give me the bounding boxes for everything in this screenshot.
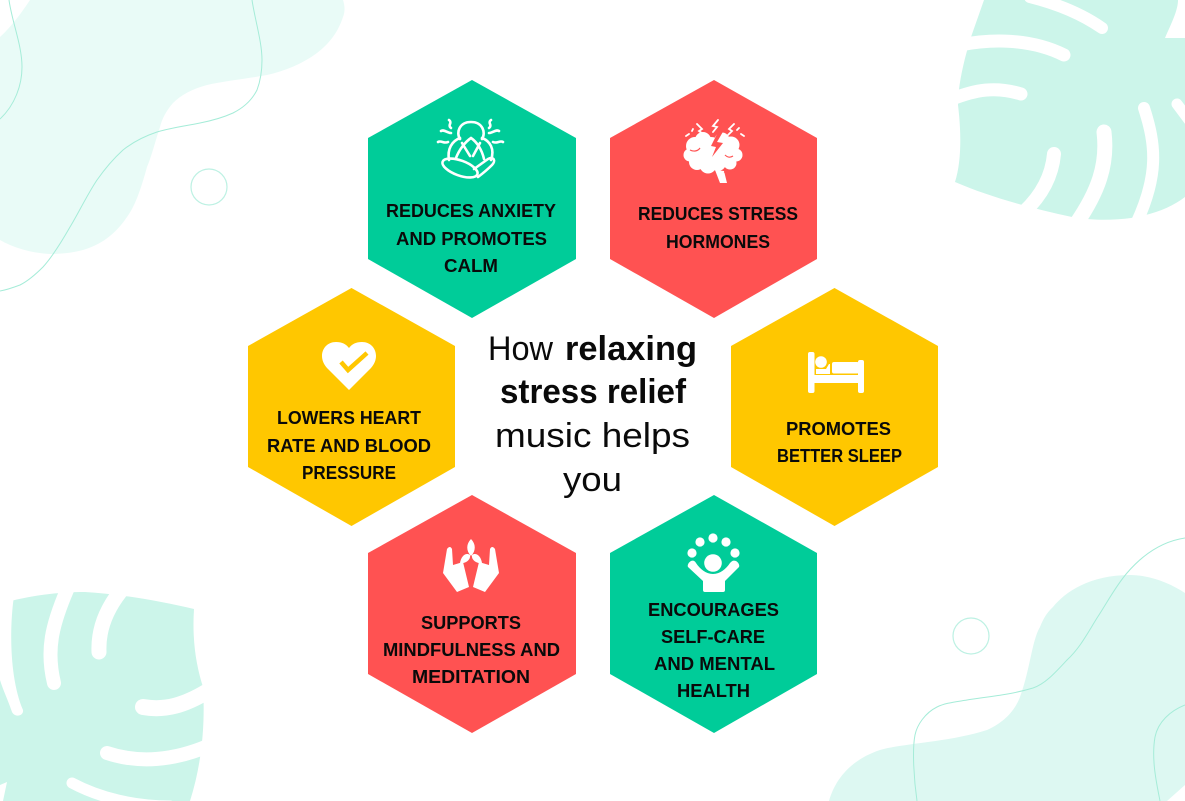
icon: hands with lotus — [443, 539, 499, 592]
hexagon — [610, 495, 817, 733]
label: HEALTH — [677, 680, 750, 701]
panel: encourages self-care — [610, 495, 817, 733]
hexagon — [248, 288, 455, 526]
label: HORMONES — [666, 231, 770, 252]
hexagon — [610, 80, 817, 318]
label: CALM — [444, 255, 498, 276]
icon: bed — [808, 352, 864, 393]
label: RATE AND BLOOD — [267, 435, 431, 456]
background leaf: bottom left — [0, 590, 208, 801]
background blob: top left — [0, 0, 344, 291]
label: MINDFULNESS AND — [383, 639, 560, 660]
panel: lowers heart rate — [248, 288, 455, 526]
icon: brain with lightning — [684, 120, 744, 183]
background blob: bottom right — [829, 538, 1185, 801]
title: How — [488, 330, 553, 368]
title: relaxing — [565, 330, 697, 368]
label: AND PROMOTES — [396, 228, 547, 249]
background leaf: top right — [952, 0, 1185, 224]
hexagon — [368, 80, 576, 318]
title: music helps — [495, 417, 690, 455]
panel: promotes better sleep — [731, 288, 938, 526]
panel: supports mindfulness — [368, 495, 576, 733]
title: you — [563, 461, 622, 499]
label: AND MENTAL — [654, 653, 775, 674]
label: REDUCES STRESS — [638, 203, 798, 224]
label: MEDITATION — [412, 666, 530, 687]
label: SUPPORTS — [421, 612, 521, 633]
panel: reduces stress hormones — [610, 80, 817, 318]
icon: meditating person — [438, 120, 503, 181]
panel: reduces anxiety — [368, 80, 576, 318]
label: LOWERS HEART — [277, 407, 422, 428]
label: ENCOURAGES — [648, 599, 779, 620]
icon: heart with check — [322, 342, 376, 390]
hexagon — [368, 495, 576, 733]
title: stress relief — [500, 373, 687, 411]
label: PROMOTES — [786, 418, 891, 439]
hexagon — [731, 288, 938, 526]
label: BETTER SLEEP — [777, 445, 902, 466]
label: PRESSURE — [302, 462, 396, 483]
icon: person with circles — [687, 533, 740, 592]
label: SELF-CARE — [661, 626, 765, 647]
label: REDUCES ANXIETY — [386, 200, 557, 221]
